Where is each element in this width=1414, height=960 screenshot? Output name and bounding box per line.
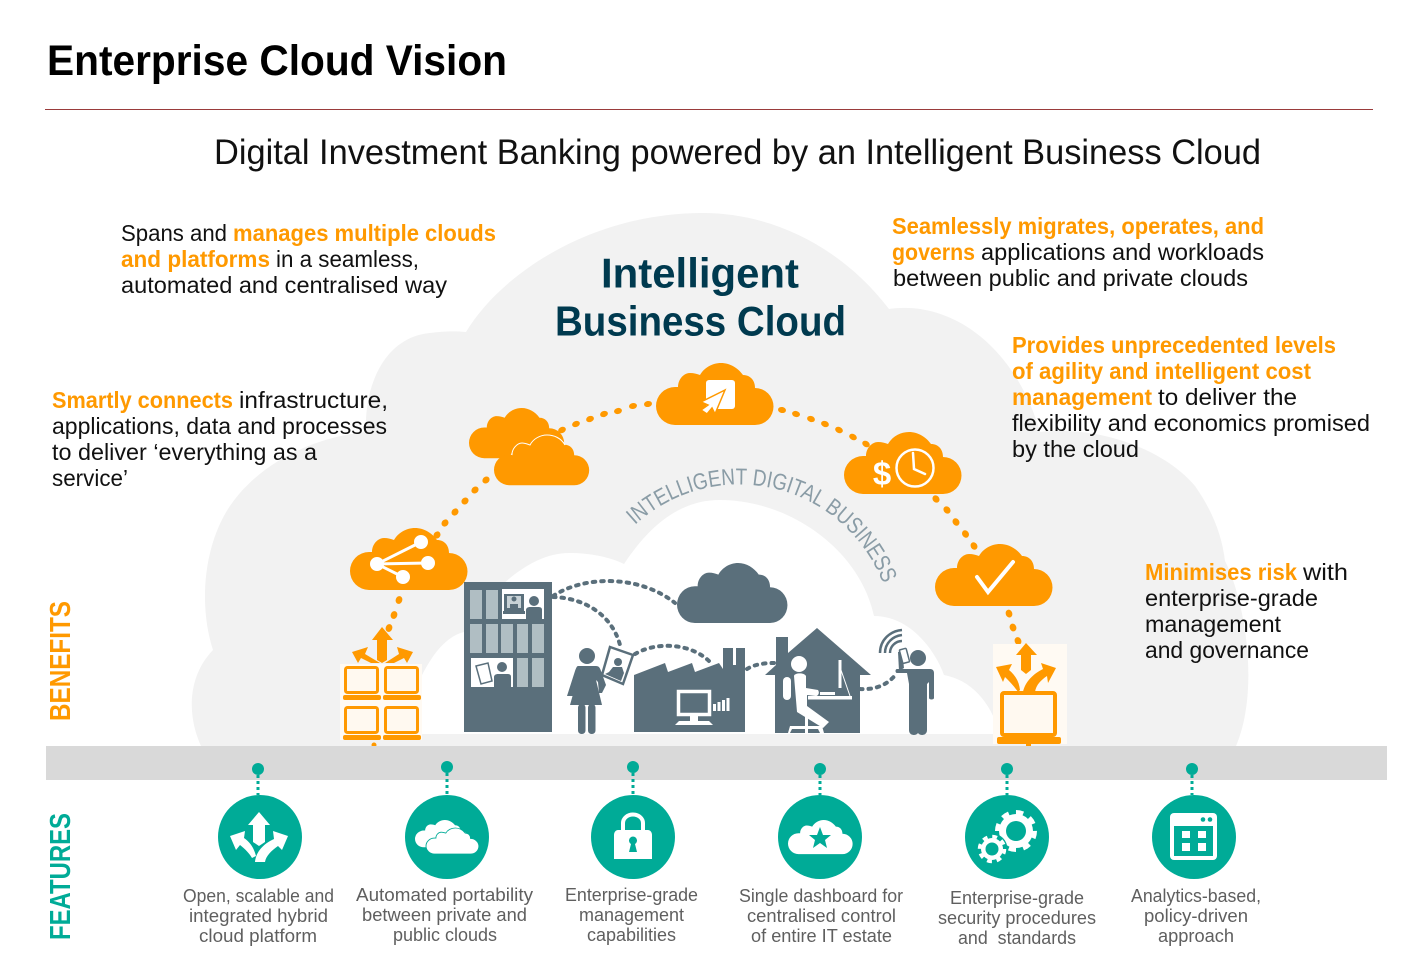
heading: Intelligent Business Cloud: Business Cloud bbox=[555, 298, 846, 344]
background cloud: intelligent business cloud bbox=[192, 213, 1248, 746]
text block: minimises risk: management bbox=[1145, 611, 1282, 637]
text block: minimises risk: Minimises risk bbox=[1145, 559, 1297, 585]
text block: minimises risk bbox=[1145, 559, 1348, 663]
icon: cloud with cursor bbox=[656, 363, 774, 425]
feature: automated portability: Automated portability bbox=[356, 885, 533, 905]
feature: automated portability bbox=[356, 761, 533, 945]
icon: cloud with dollar and clock bbox=[844, 432, 962, 494]
feature: management capabilities: capabilities bbox=[587, 925, 676, 945]
benefits / features band bbox=[46, 746, 1387, 780]
feature: single dashboard: Single dashboard for bbox=[739, 886, 903, 906]
icon: cloud with share nodes bbox=[350, 528, 468, 590]
feature: management capabilities: management bbox=[579, 905, 684, 925]
text block: unprecedented agility: management bbox=[1012, 384, 1152, 410]
feature: automated portability: public clouds bbox=[393, 925, 497, 945]
feature: single dashboard: centralised control bbox=[747, 906, 896, 926]
text block: manages multiple clouds: and platforms bbox=[121, 246, 270, 272]
feature: single dashboard bbox=[739, 763, 903, 946]
subtitle: Digital Investment Banking powered by an Intelligent Business Cloud bbox=[214, 133, 1261, 172]
text block: manages multiple clouds: in a seamless, bbox=[276, 246, 419, 272]
icon: woman with tablet bbox=[567, 647, 633, 734]
feature: single dashboard: of entire IT estate bbox=[751, 926, 892, 946]
text block: unprecedented agility: Provides unprecedented levels bbox=[1012, 332, 1336, 358]
inner white cloud: intelligent digital business bbox=[400, 500, 1000, 734]
text block: unprecedented agility: flexibility and economics promised bbox=[1012, 410, 1370, 436]
title: Enterprise Cloud Vision bbox=[47, 37, 507, 85]
dotted orange path linking clouds bbox=[372, 400, 1022, 748]
feature: hybrid cloud platform: Open, scalable and bbox=[183, 886, 334, 906]
text block: smartly connects: infrastructure, bbox=[239, 387, 388, 413]
feature: management capabilities bbox=[565, 761, 698, 945]
text block: unprecedented agility: of agility and intelligent cost bbox=[1012, 358, 1311, 384]
icon: dark cloud bbox=[677, 563, 787, 623]
feature: management capabilities: Enterprise-grade bbox=[565, 885, 698, 905]
text block: unprecedented agility bbox=[1012, 332, 1370, 462]
text block: smartly connects: applications, data and processes bbox=[52, 413, 387, 439]
label: features: FEATURES bbox=[45, 813, 77, 940]
feature: security procedures bbox=[938, 763, 1096, 948]
text block: smartly connects: to deliver ‘everything as a bbox=[52, 439, 317, 465]
text block: unprecedented agility: to deliver the bbox=[1158, 384, 1297, 410]
text block: unprecedented agility: by the cloud bbox=[1012, 436, 1139, 462]
heading: Intelligent Business Cloud: Intelligent bbox=[601, 250, 799, 296]
icon: three-way arrows over laptop bbox=[993, 643, 1067, 747]
text block: manages multiple clouds: manages multiple clouds bbox=[233, 220, 496, 246]
feature: analytics-based approach: approach bbox=[1158, 926, 1234, 946]
text block: manages multiple clouds: automated and centralised way bbox=[121, 272, 447, 298]
text block: seamlessly migrates bbox=[892, 213, 1264, 291]
icon: double cloud bbox=[469, 408, 589, 485]
icon: cloud with check mark bbox=[935, 544, 1052, 606]
icon: cloud with dollar and clock: $ bbox=[873, 455, 891, 492]
feature: hybrid cloud platform: integrated hybrid bbox=[189, 906, 328, 926]
text block: smartly connects: service’ bbox=[52, 465, 128, 491]
text block: seamlessly migrates: governs bbox=[892, 239, 975, 265]
text block: seamlessly migrates: applications and workloads bbox=[981, 239, 1264, 265]
feature: automated portability: between private and bbox=[362, 905, 527, 925]
text block: seamlessly migrates: between public and private clouds bbox=[893, 265, 1248, 291]
icon: four laptops with arrows bbox=[340, 627, 422, 740]
label: benefits: BENEFITS bbox=[45, 601, 77, 721]
feature: analytics-based approach: policy-driven bbox=[1144, 906, 1248, 926]
feature: hybrid cloud platform bbox=[183, 763, 334, 946]
text block: smartly connects bbox=[52, 387, 388, 491]
text block: minimises risk: enterprise-grade bbox=[1145, 585, 1318, 611]
icon: house with person at desk bbox=[765, 628, 871, 733]
heading: Intelligent Business Cloud bbox=[555, 250, 846, 344]
text block: manages multiple clouds: Spans and bbox=[121, 220, 227, 246]
text block: smartly connects: Smartly connects bbox=[52, 387, 233, 413]
feature: analytics-based approach bbox=[1131, 763, 1261, 946]
icon: factory with computer bbox=[634, 648, 745, 732]
dark dotted connectors between scene elements bbox=[553, 581, 897, 689]
text block: minimises risk: with bbox=[1302, 559, 1348, 585]
icon: office building bbox=[464, 582, 552, 732]
feature: hybrid cloud platform: cloud platform bbox=[199, 926, 317, 946]
text block: seamlessly migrates: Seamlessly migrates, operates, and bbox=[892, 213, 1264, 239]
text block: manages multiple clouds bbox=[121, 220, 496, 298]
feature: security procedures: and standards bbox=[958, 928, 1076, 948]
icon: man on phone with signal bbox=[880, 630, 934, 735]
feature: security procedures: Enterprise-grade bbox=[950, 888, 1084, 908]
arc label: intelligent digital business: INTELLIGENT DIGITAL BUSINESS bbox=[626, 468, 896, 582]
text block: minimises risk: and governance bbox=[1145, 637, 1309, 663]
feature: analytics-based approach: Analytics-based, bbox=[1131, 886, 1261, 906]
feature: security procedures: security procedures bbox=[938, 908, 1096, 928]
